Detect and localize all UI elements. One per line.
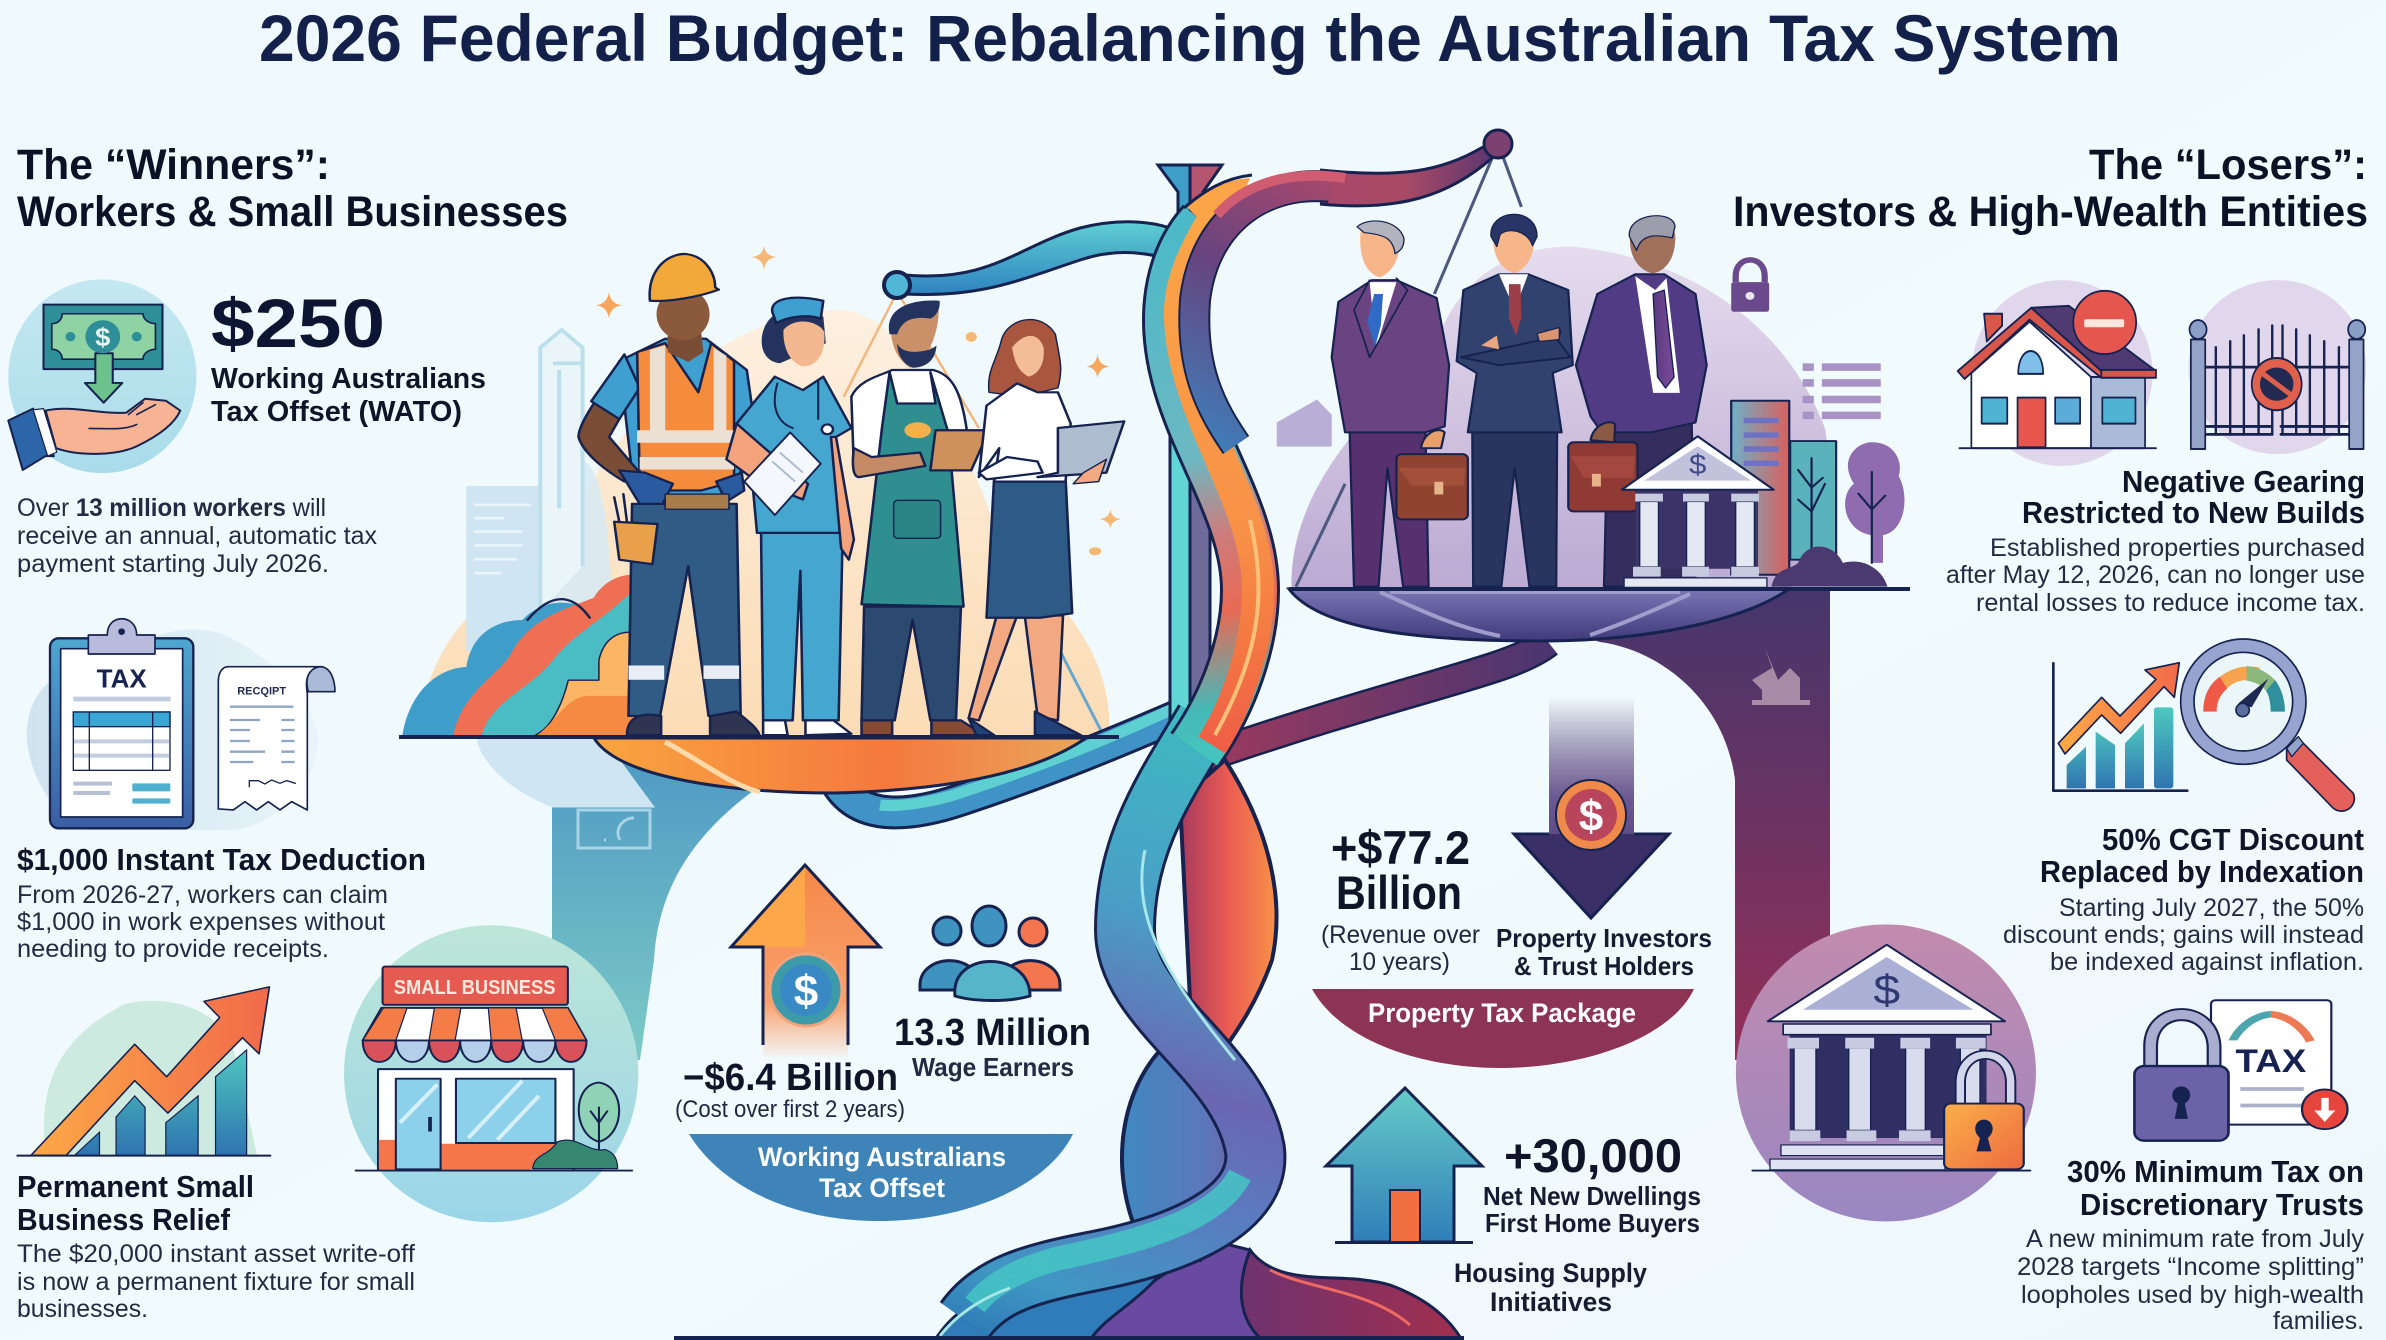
right upper beam	[1320, 130, 1512, 206]
icon: small business store	[344, 925, 638, 1222]
text: minimum tax: 2028 targets “Income splitting”	[2017, 1253, 2364, 1281]
housing stat: Housing Supply	[1454, 1258, 1647, 1288]
housing stat	[1326, 1088, 1701, 1317]
icon: tax clipboard and receipt: RECQIPT	[237, 685, 286, 697]
icon: house arrow	[1326, 1088, 1482, 1244]
text: CGT: 50% CGT Discount	[2102, 822, 2364, 857]
icon: gate with no entry	[2188, 280, 2366, 454]
worker: construction	[578, 254, 760, 735]
text: minimum tax: loopholes used by high-wealth	[2021, 1281, 2364, 1309]
icon: bank with lock: $	[1873, 966, 1900, 1013]
upper central ribbon	[1172, 175, 1345, 750]
text: small business relief: is now a permanent fixture for small	[17, 1268, 415, 1296]
padlock	[1944, 1055, 2024, 1169]
text: CGT: Replaced by Indexation	[2040, 854, 2364, 889]
text: minimum tax: Discretionary Trusts	[2080, 1187, 2364, 1222]
text: negative gearing: Established properties purchased	[1990, 534, 2365, 562]
investor 3	[1568, 216, 1707, 587]
right lower beam	[1190, 642, 1548, 762]
stat: wage earners: Wage Earners	[912, 1052, 1074, 1082]
text: small business relief: Business Relief	[17, 1202, 231, 1237]
buildings and tree	[1731, 401, 1904, 587]
left lower beam	[830, 708, 1180, 812]
investor 1	[1332, 221, 1468, 587]
icon: small business store: SMALL BUSINESS	[394, 977, 556, 999]
small bank	[1622, 436, 1774, 587]
text: WATO: Over 13 million workers will	[17, 494, 326, 522]
icon: up arrow with coin	[731, 865, 880, 1060]
clipboard	[744, 432, 821, 515]
text: tax deduction: $1,000 in work expenses without	[17, 908, 385, 936]
icon: tax clipboard and receipt	[27, 619, 335, 830]
text: negative gearing	[1946, 464, 2365, 617]
stat: revenue: (Revenue over	[1321, 921, 1480, 949]
text: WATO: $250	[211, 285, 385, 362]
stat: revenue	[1321, 821, 1480, 976]
stat: wage earners: 13.3 Million	[894, 1012, 1091, 1054]
left support panel	[552, 738, 840, 1060]
text: minimum tax	[2017, 1154, 2364, 1335]
stat: wage earners	[894, 906, 1091, 1082]
text: tax deduction: $1,000 Instant Tax Deduction	[17, 842, 426, 877]
label bowl: working australians tax offset	[689, 1134, 1073, 1221]
icon: money to hand: $	[95, 323, 111, 352]
label: property investors	[1496, 923, 1712, 981]
worker: office	[969, 320, 1124, 735]
icon: faint banknote	[578, 810, 650, 848]
left scale backdrop	[403, 245, 1124, 807]
text: WATO	[17, 285, 486, 578]
receipt	[218, 667, 322, 810]
housing stat: Net New Dwellings	[1483, 1181, 1701, 1211]
icon: tax clipboard and receipt: TAX	[97, 663, 147, 693]
label bowl: property tax package	[1312, 989, 1694, 1068]
heading: losers	[1733, 141, 2368, 236]
label bowl: working australians tax offset: Tax Offset	[819, 1173, 945, 1203]
heading: losers: The “Losers”:	[2089, 141, 2367, 189]
heading: winners: Workers & Small Businesses	[17, 188, 568, 236]
icon: padlock and tax document: TAX	[2236, 1044, 2306, 1080]
stat: revenue: +$77.2	[1331, 821, 1470, 874]
text: negative gearing: rental losses to reduce income tax.	[1976, 589, 2365, 617]
right support panel	[1560, 590, 1830, 1060]
text: tax deduction: From 2026-27, workers can claim	[17, 881, 388, 909]
text: CGT	[2003, 822, 2364, 976]
label: property investors: & Trust Holders	[1514, 951, 1694, 981]
text: tax deduction	[17, 842, 426, 963]
left upper beam	[884, 222, 1185, 298]
text: negative gearing: after May 12, 2026, can no longer use	[1946, 561, 2365, 589]
stat: revenue: 10 years)	[1349, 948, 1450, 976]
stat: WATO cost: −$6.4 Billion	[683, 1057, 898, 1099]
stat: revenue: Billion	[1336, 866, 1462, 919]
icon: house with no entry	[1958, 280, 2156, 466]
title: 2026 Federal Budget: Rebalancing the Australian Tax System	[259, 1, 2121, 75]
sparkles	[596, 245, 1121, 555]
text: minimum tax: 30% Minimum Tax on	[2067, 1154, 2364, 1189]
text: small business relief: businesses.	[17, 1295, 148, 1323]
text: minimum tax: A new minimum rate from July	[2026, 1225, 2364, 1253]
housing stat: +30,000	[1504, 1129, 1682, 1182]
investor 2	[1457, 214, 1573, 587]
right pan	[1289, 587, 1910, 641]
stat: WATO cost: (Cost over first 2 years)	[675, 1096, 905, 1123]
list lines	[1803, 367, 1881, 415]
text: WATO: payment starting July 2026.	[17, 550, 329, 578]
text: negative gearing: Negative Gearing	[2122, 464, 2365, 499]
central mast	[1158, 165, 1222, 720]
heading: losers: Investors & High-Wealth Entities	[1733, 188, 2368, 236]
text: negative gearing: Restricted to New Builds	[2022, 495, 2365, 530]
icon: money to hand	[8, 279, 196, 473]
stat: WATO cost	[675, 865, 905, 1123]
label bowl: property tax package: Property Tax Package	[1368, 998, 1636, 1028]
icon: faint house	[1277, 400, 1332, 448]
small bank: $	[1689, 450, 1706, 480]
base line	[674, 1336, 1464, 1340]
text: small business relief	[17, 1169, 415, 1323]
text: CGT: be indexed against inflation.	[2050, 948, 2364, 976]
icon: down arrow with coin: $	[1579, 792, 1603, 841]
icon: up arrow with coin: $	[794, 967, 818, 1016]
icon: people	[920, 906, 1060, 1000]
text: WATO: receive an annual, automatic tax	[17, 522, 377, 550]
right scale backdrop and investors	[1277, 144, 1904, 589]
worker: cafe owner	[851, 301, 989, 735]
heading: winners: The “Winners”:	[17, 141, 330, 189]
icon: down arrow with coin	[1514, 697, 1669, 918]
text: small business relief: Permanent Small	[17, 1169, 254, 1204]
label bowl: working australians tax offset: Working Australians	[758, 1142, 1006, 1172]
text: tax deduction: needing to provide receipts.	[17, 935, 329, 963]
heading: winners	[17, 141, 568, 236]
icon: padlock and tax document	[2134, 1000, 2348, 1141]
icon: bank with lock	[1736, 924, 2036, 1221]
icon: growth chart	[17, 987, 270, 1156]
housing stat: First Home Buyers	[1485, 1208, 1700, 1238]
housing stat: Initiatives	[1490, 1287, 1612, 1317]
worker: nurse	[726, 298, 854, 735]
icon: faint house	[1752, 648, 1810, 705]
icon: padlock	[1731, 260, 1769, 312]
text: CGT: discount ends; gains will instead	[2003, 921, 2364, 949]
clouds	[403, 575, 640, 735]
label: property investors: Property Investors	[1496, 923, 1712, 953]
icon: chart and gauge magnifier	[2053, 639, 2354, 811]
left pan	[399, 735, 1119, 793]
text: minimum tax: families.	[2273, 1307, 2364, 1335]
text: small business relief: The $20,000 instant asset write-off	[17, 1240, 415, 1268]
text: WATO: Tax Offset (WATO)	[211, 396, 462, 428]
text: CGT: Starting July 2027, the 50%	[2059, 894, 2364, 922]
lower central twist	[935, 720, 1462, 1340]
text: WATO: Working Australians	[211, 363, 486, 395]
